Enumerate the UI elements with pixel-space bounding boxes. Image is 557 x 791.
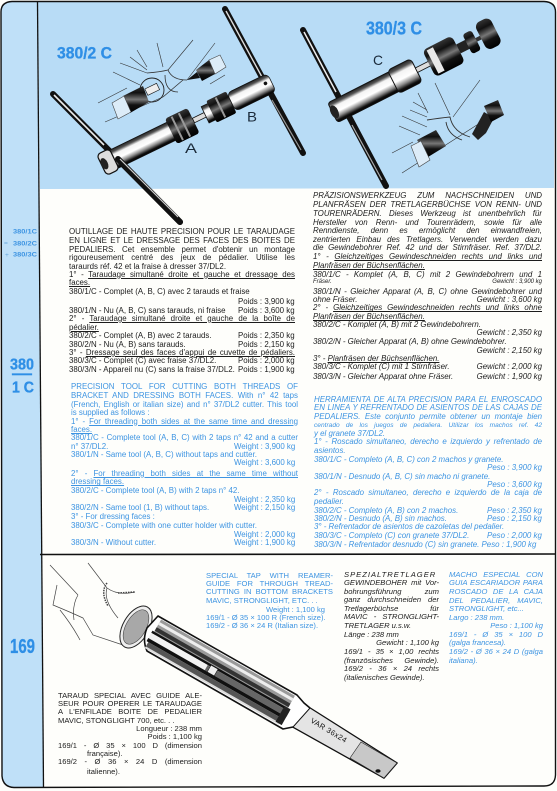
text block: German description: 380/2/N - Gleicher Apparat (A, B) ohne Gewindebohrer. <box>313 336 507 346</box>
text block: French 169 description <box>58 690 202 776</box>
text block: English 169 description <box>206 570 333 630</box>
text block: French 169 description: française). <box>87 749 122 758</box>
text block: English description: Weight : 3,600 kg <box>234 458 295 467</box>
text block: English description: 1° - For threading both sides at the same time and dressing <box>71 416 298 426</box>
text block: Spanish description: Peso : 2,150 kg <box>487 514 542 523</box>
illustration: tool 380/2 C with handles <box>53 9 303 222</box>
text block: German description: Gewicht : 3,900 kg <box>492 279 542 285</box>
text block: Spanish description: asientos. <box>314 446 346 455</box>
text block: Spanish description: 380/3/N - Refrentador desnudo (C) sin granete. Peso : 1,900 kg <box>314 540 536 548</box>
text block: German 169 description: TRETLAGER u.s.w. <box>344 621 411 630</box>
text block: Spanish description: Peso : 3,900 kg <box>487 463 542 472</box>
text block: German description: PLANFRÄSEN DER TRETLAGERBÜCHSE VON RENN- UND <box>313 200 542 208</box>
text block: German 169 description: Länge : 238 mm <box>344 630 399 638</box>
text block: English description <box>71 382 298 547</box>
text block: French description: 380/3/C - Complet (C) avec fraise 37/DL2. <box>69 356 216 365</box>
text block: French description: Poids : 2,000 kg <box>238 356 295 365</box>
text block: English description: is supplied as follows : <box>71 408 150 417</box>
text block: English description: n° 37/DL2. <box>71 442 108 450</box>
text block: German description: 1° - Gleichzeitiges Gewindeschneiden rechts und links und <box>313 252 542 261</box>
text block: French description: Poids : 1,900 kg <box>238 365 295 374</box>
text block: French description: taraurds réf. 42 et la fraise à dresser 37/DL2. <box>69 262 226 270</box>
text block: Spanish description: 380/3/C - Completo (C) con granete 37/DL2. <box>314 531 469 540</box>
heading: 380/2 C: 380/2 C <box>57 44 112 62</box>
text block: German description: Planfräsen der Büchsenflächen. <box>313 261 425 270</box>
panel: left blue column <box>1 2 44 787</box>
text block: English 169 description: 169/2 - Ø 36 × 24 R (Italian size). <box>206 621 318 630</box>
text block: French 169 description: A L'ENFILADE BOITE DE PEDALIER <box>58 707 202 716</box>
illustration: bottom bracket shell for tap 169 <box>50 563 159 653</box>
text block: French description: 380/1/C - Complet (A, B, C) avec 2 tarauds et fraise <box>69 286 250 296</box>
sidebar: model references: 380/2C <box>13 240 37 248</box>
text block: German description: Gewicht : 2,150 kg <box>477 346 542 354</box>
sidebar: number 380 / 1 C <box>10 356 34 396</box>
text block: Spanish description: 380/1/C - Completo (A, B, C) con 2 machos y granete. <box>314 455 503 464</box>
text block: German 169 description <box>344 570 439 682</box>
text block: Spanish 169 description: 169/1 - Ø 35 × 100 D <box>449 630 543 638</box>
text block: German 169 description: bohrungsführung zum <box>344 586 439 596</box>
text block: Spanish 169 description: ROSCADO DE LA CAJA <box>449 586 543 596</box>
illustration: tool 380/3 C with handle <box>303 17 503 186</box>
text block: English description: Weight : 1,900 kg <box>234 538 295 547</box>
text block: Spanish 169 description: MACHO ESPECIAL CON <box>449 570 543 579</box>
text block: French 169 description: Longueur : 238 mm <box>136 724 202 733</box>
text block: French description: Poids : 3,900 kg <box>238 296 295 306</box>
text block: German description: Gewicht : 3,600 kg <box>477 294 542 304</box>
text block: German description: 380/3/N - Gleicher Apparat ohne Fräser. <box>313 372 453 380</box>
text block: German 169 description: 169/2 - 36 × 24 rechts <box>344 664 439 673</box>
text block: German description: zentrierten Einbau des Tretlagers. Verwendet werden dazu <box>313 235 542 244</box>
text block: German description: Hersteller von Renn- und Tourenrädern, sowie für alle <box>313 218 542 227</box>
text block: German 169 description: MAVIC - STRONGLIGHT- <box>344 612 439 621</box>
text block: Spanish description: 380/1/N - Desnudo (A, B, C) sin macho ni granete. <box>314 472 490 480</box>
sidebar: number 380 / 1 C: 1 C <box>12 380 34 396</box>
text block: German description: Planfräsen der Büchsenflächen. <box>313 312 425 320</box>
text block: German description: ohne Fräser. <box>313 294 357 304</box>
text block: Spanish description: 380/2/N - Desnudo (A, B) sin machos. <box>314 514 447 523</box>
text block: French description: EN LIGNE ET LE DRESSAGE DES FACES DES BOITES DE <box>69 236 295 244</box>
text block: German description: Gewicht : 2,350 kg <box>477 328 542 337</box>
text block: French 169 description: Poids : 1,100 kg <box>148 732 202 741</box>
text block: German description: Renndienste, denn es ermöglicht den einwandfreien, <box>313 226 542 235</box>
text block: German 169 description: ganz durchschneiden der <box>344 595 439 604</box>
text block: German description: Gewicht : 2,000 kg <box>477 362 542 371</box>
text block: German 169 description: (italienisches Gewinde). <box>344 673 425 682</box>
text block: English description: 380/3/C - Complete with one cutter holder with cutter. <box>71 521 257 530</box>
text block: German description <box>313 191 542 380</box>
sidebar: model references <box>4 228 37 259</box>
text block: German description: 380/2/C - Komplet (A, B) mit 2 Gewindebohrern. <box>313 320 481 329</box>
text block: Spanish description: PEDALIERS. Este conjunto permite obtener un montaje bien <box>314 412 542 421</box>
text block: French 169 description: SEUR POUR OPERER LE TARAUDAGE <box>58 699 202 708</box>
text block: English description: Weight : 2,350 kg <box>234 494 295 504</box>
text block: English description: Weight : 2,150 kg <box>234 503 295 512</box>
illustration: special tap <box>143 616 397 778</box>
sidebar: model references: + <box>5 252 9 259</box>
text block: English description: 3° - For dressing faces : <box>71 512 155 521</box>
text block: English description: PRECISION TOOL FOR CUTTING BOTH THREADS OF <box>71 382 298 391</box>
text block: Spanish 169 description <box>449 570 543 664</box>
sidebar: model references: 380/1C <box>13 228 37 236</box>
sidebar: model references: 380/3C <box>13 252 37 258</box>
text block: German 169 description: Tretlagerbüchse für <box>344 604 439 613</box>
text block: English 169 description: MAVIC, STRONGLIGHT, ETC. . . <box>206 596 318 605</box>
text block: English description: 380/1/C - Complete tool (A, B, C) with 2 taps n° 42 and a cutter <box>71 433 298 442</box>
label: engraved size on tap: VAR 36x24 <box>309 716 349 745</box>
text block: French 169 description: 169/2 - Ø 36 × 24 D (dimension <box>58 757 202 766</box>
text block: English description: 2° - For threading both sides at the same time without <box>71 469 298 478</box>
text block: French description: 380/3/N - Appareil nu (C) sans la fraise 37/DL2. <box>69 365 235 374</box>
text block: French 169 description: MAVIC, STONGLIGHT 700, etc. . . <box>58 716 174 724</box>
text block: French description: 380/2/N - Nu (A, B) sans tarauds. <box>69 340 186 348</box>
text block: English description: BRACKET AND DRESSING BOTH FACES. With n° 42 taps <box>71 390 298 400</box>
text block: French description: pédalier. <box>69 323 99 332</box>
text block: German description: TOURENRÄDERN. Dieses Werkzeug ist unentbehrlich für <box>313 209 542 218</box>
text block: French description: 380/1/N - Nu (A, B, C) sans tarauds, ni fraise <box>69 306 226 314</box>
text block: French description: OUTILLAGE DE HAUTE PRECISION POUR LE TARAUDAGE <box>69 227 295 236</box>
text block: English 169 description: SPECIAL TAP WITH REAMER- <box>206 570 333 580</box>
text block: French description: Poids : 2,350 kg <box>238 331 295 340</box>
text block: French 169 description: 169/1 - Ø 35 × 100 D (dimension <box>58 740 202 750</box>
text block: French description: PEDALIERS. Cet ensemble permet d'obtenir un montage <box>69 244 295 254</box>
text block: Spanish 169 description: STRONGLIGHT, etc... <box>449 604 524 613</box>
text block: French description: 1° - Taraudage simultané droite et gauche et dressage des <box>69 270 295 279</box>
text block: English description: 380/2/N - Same tool (1, B) without taps. <box>71 503 209 512</box>
label: C: C <box>373 52 383 68</box>
text block: German description: Fräser. <box>313 279 332 285</box>
text block: Spanish 169 description: Largo : 238 mm. <box>449 613 504 622</box>
text block: French description: Poids : 3,600 kg <box>238 306 295 314</box>
text block: German 169 description: GEWINDEBOHER mit Vor- <box>344 578 439 587</box>
text block: Spanish 169 description: Peso : 1,100 kg <box>490 621 543 630</box>
text block: German description: 3° - Planfräsen der Büchsenflächen. <box>313 354 439 363</box>
text block: English description: Weight : 2,000 kg <box>234 530 295 538</box>
text block: English description: Weight : 3,900 kg <box>234 442 295 450</box>
illustration: bracket with cutters for 380/2 C <box>98 40 226 122</box>
text block: Spanish description: Peso : 3,600 kg <box>487 480 542 489</box>
heading: 380/3 C: 380/3 C <box>366 18 422 38</box>
illustration: bracket with cutter for 380/3 C <box>392 80 504 173</box>
text block: Spanish 169 description: italiana). <box>449 656 478 664</box>
text block: French 169 description: italienne). <box>87 766 120 776</box>
text block: Spanish description: 1° - Roscado simultaneo, derecho e izquierdo y refrentado de <box>314 437 542 446</box>
text block: Spanish description: Peso : 2,000 kg <box>487 531 542 540</box>
text block: French description: 2° - Taraudage simultané droite et gauche de la boîte de <box>69 314 295 323</box>
text block: Spanish 169 description: DEL PEDALIER, MAVIC, <box>449 596 543 604</box>
text block: German description: die Gewindebohrer Ref. 42 und der Stirnfräser. Ref. 37/DL2. <box>313 243 542 252</box>
text block: English description: faces. <box>71 424 92 434</box>
text block: French description: faces. <box>69 278 90 287</box>
text block: German 169 description: (französisches Gewinde). <box>344 656 439 664</box>
label: A: A <box>185 140 198 156</box>
text block: English description: 380/1/N - Same tool (A, B, C) without taps and cutter. <box>71 450 257 459</box>
text block: Spanish description: centrado de los juegos de pedaliera. Utilizar los machos ref. 42 <box>314 422 542 428</box>
text block: Spanish description: pedalier. <box>314 497 344 506</box>
text block: German description: 2° - Gleichzeitiges Gewindeschneiden rechts und links ohne <box>313 303 542 312</box>
text block: Spanish description: Peso : 2,350 kg <box>487 506 542 514</box>
text block: French description: 3° - Dressage seul des faces d'appui de cuvette de pédaliers. <box>69 348 295 357</box>
text block: English 169 description: GUIDE FOR THROUGH TREAD- <box>206 579 333 588</box>
text block: English 169 description: Weight : 1,100 kg <box>266 604 325 614</box>
text block: English description: (French, English or italian size) and n° 37/DL2 cutter. This tool <box>71 400 298 408</box>
text block: German description: 380/1/C - Komplet (A, B, C) mit 2 Gewindebohrern und 1 <box>313 270 542 279</box>
text block: German description: 380/1/N - Gleicher Apparat (A, B, C) ohne Gewindebohrer und <box>313 286 542 296</box>
text block: German description: Gewicht : 1,900 kg <box>477 372 542 380</box>
text block: English description: 380/3/N - Without cutter. <box>71 538 156 547</box>
text block: French description: Poids : 2,150 kg <box>238 340 295 348</box>
text block: Spanish description: HERRAMIENTA DE ALTA PRECISION PARA EL ENROSCADO <box>314 395 542 404</box>
sidebar: number 380 / 1 C: 380 <box>10 356 34 374</box>
text block: German 169 description: 169/1 - 35 × 1,00 rechts <box>344 646 439 656</box>
text block: Spanish description: 2° - Roscado simultaneo, derecho e izquierdo de la caja de <box>314 488 542 497</box>
text block: English description: dressing faces. <box>71 477 124 486</box>
text block: Spanish description: y el granete 37/DL2. <box>314 429 385 438</box>
text block: Spanish 169 description: 169/2 - Ø 36 × 24 D (galga <box>449 646 543 656</box>
text block: English description: 380/2/C - Complete tool (A, B) with 2 taps n° 42. <box>71 486 240 495</box>
text block: English 169 description: CUTTING IN BOTTOM BRACKETS <box>206 587 333 596</box>
text block: Spanish 169 description: GUIA ESCARIADOR PARA <box>449 578 543 587</box>
text block: French 169 description: TARAUD SPECIAL AVEC GUIDE ALE- <box>58 690 202 700</box>
text block: German description: PRÄZISIONSWERKZEUG ZUM NACHSCHNEIDEN UND <box>313 191 542 200</box>
label: B: B <box>247 108 257 124</box>
text block: Spanish 169 description: (galga francesa). <box>449 638 506 647</box>
panel: top blue illustration band <box>38 2 555 189</box>
text block: French description: rigoureusement centré des jeux de pédalier. Utilise les <box>69 253 295 262</box>
text block: German 169 description: SPEZIALTRETLAGER <box>344 570 436 578</box>
text block: French description: 380/2/C - Complet (A, B) avec 2 tarauds. <box>69 331 212 340</box>
text block: German 169 description: Gewicht : 1,100 kg <box>376 638 439 647</box>
sidebar: number 169: 169 <box>10 636 35 658</box>
text block: French description <box>69 227 295 374</box>
text block: German description: 380/3/C - Komplet (C) mit 1 Stirnfräser. <box>313 362 450 371</box>
sidebar: model references: = <box>4 240 8 247</box>
text block: English 169 description: 169/1 - Ø 35 × 100 R (French size). <box>206 613 326 622</box>
text block: Spanish description: 3° - Refrentador de asientos de cazoletas del pedalier. <box>314 522 504 531</box>
text block: Spanish description: 380/2/C - Completo (A, B) con 2 machos. <box>314 506 458 514</box>
text block: Spanish description <box>314 395 542 548</box>
text block: Spanish description: EN LINEA Y REFRENTADO DE ASIENTOS DE LAS CAJAS DE <box>314 403 542 412</box>
